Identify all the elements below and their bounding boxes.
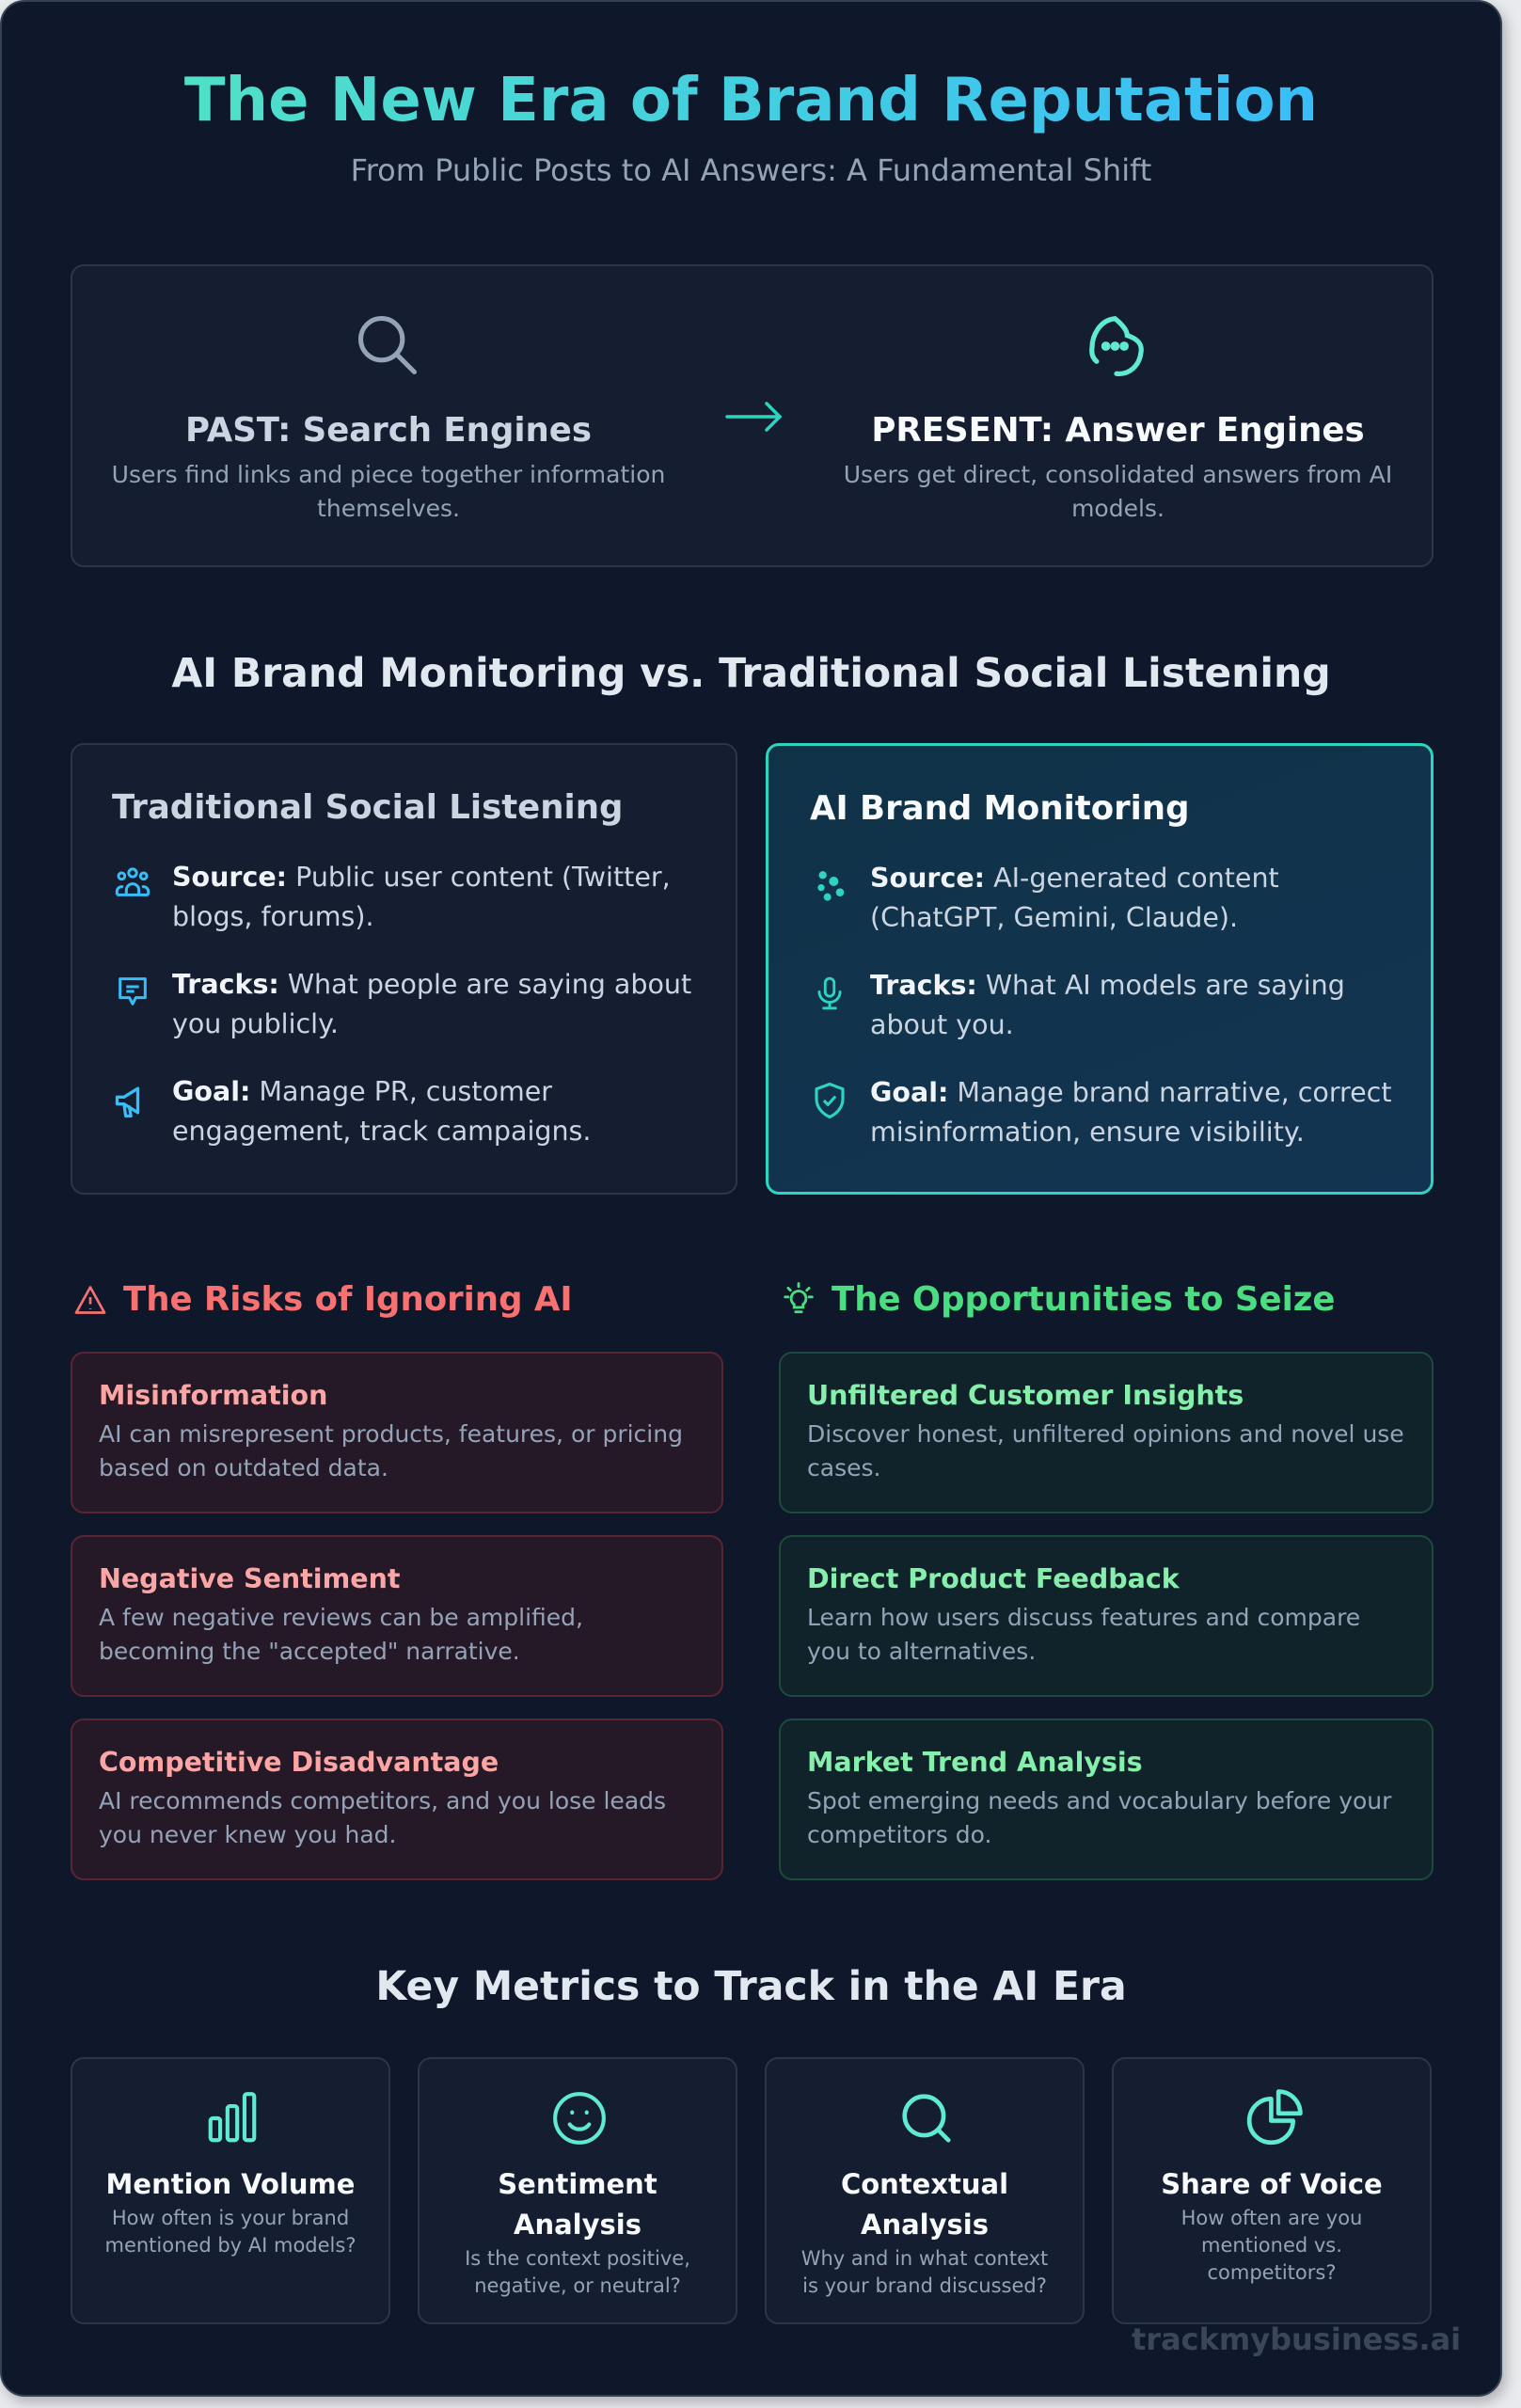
metric: sentiment analysis: Is the context positive,: [465, 2247, 690, 2270]
metric: mention volume: How often is your brand: [112, 2207, 349, 2229]
opportunity card: insights: Unfiltered Customer Insights: [807, 1380, 1244, 1411]
metric: contextual analysis: Why and in what context: [801, 2247, 1048, 2270]
heading: comparison: AI Brand Monitoring vs. Traditional Social Listening: [171, 651, 1331, 697]
heading: past: PAST: Search Engines: [185, 411, 592, 450]
metric: share of voice: [1112, 2057, 1432, 2324]
risk card: negative sentiment: Negative Sentiment: [99, 1563, 401, 1594]
heading: risks: The Risks of Ignoring AI: [123, 1280, 573, 1319]
footer: brand: trackmybusiness.ai: [1132, 2321, 1461, 2357]
icon: lightbulb: [784, 1282, 814, 1313]
item: tracks: Tracks: What people are saying about you publicly.: [172, 969, 691, 1039]
arrow: [725, 402, 783, 432]
metric: sentiment analysis: Sentiment: [498, 2168, 658, 2200]
heading: AI Brand Monitoring: [810, 789, 1189, 828]
metric: contextual analysis: Analysis: [861, 2209, 989, 2241]
metric: contextual analysis: Contextual: [841, 2168, 1008, 2200]
risk card: misinformation: AI can misrepresent products, features, or pricing based on outdated data.: [99, 1420, 683, 1481]
icon: warning: [75, 1286, 105, 1314]
heading: opportunities: The Opportunities to Seize: [832, 1280, 1335, 1319]
metric: contextual analysis: [765, 2057, 1085, 2324]
item: source: Source: AI-generated content (ChatGPT, Gemini, Claude).: [870, 863, 1279, 933]
risk card: negative sentiment: [71, 1535, 723, 1697]
metric: sentiment analysis: negative, or neutral?: [474, 2274, 681, 2297]
text: past description: Users find links and piece together information themselves.: [112, 461, 665, 522]
metric: share of voice: How often are you: [1181, 2207, 1362, 2229]
opportunity card: insights: Discover honest, unfiltered opinions and novel use cases.: [807, 1420, 1404, 1481]
text: present description: Users get direct, consolidated answers from AI models.: [844, 461, 1392, 522]
risk card: misinformation: [71, 1352, 723, 1513]
heading: present: PRESENT: Answer Engines: [871, 411, 1365, 450]
opportunity card: feedback: [779, 1535, 1434, 1697]
opportunity card: trends: Spot emerging needs and vocabulary before your competitors do.: [807, 1787, 1391, 1848]
metric: mention volume: Mention Volume: [106, 2168, 355, 2200]
opportunity card: insights: [779, 1352, 1434, 1513]
panel: AI brand monitoring: [766, 743, 1434, 1195]
item: goal: Goal: Manage brand narrative, correct misinformation, ensure visibility.: [870, 1077, 1392, 1148]
metric: sentiment analysis: [418, 2057, 737, 2324]
metric: share of voice: competitors?: [1208, 2261, 1336, 2284]
icon: search: [358, 316, 417, 374]
metric: share of voice: mentioned vs.: [1201, 2234, 1342, 2257]
item: source: Source: Public user content (Twitter, blogs, forums).: [172, 862, 671, 932]
risk card: competitive disadvantage: AI recommends competitors, and you lose leads you never knew you had.: [99, 1787, 666, 1848]
metric: sentiment analysis: Analysis: [514, 2209, 642, 2241]
item: goal: Goal: Manage PR, customer engagement, track campaigns.: [172, 1076, 591, 1147]
opportunity card: feedback: Direct Product Feedback: [807, 1563, 1180, 1594]
metric: mention volume: mentioned by AI models?: [105, 2234, 356, 2257]
metric: share of voice: Share of Voice: [1161, 2168, 1383, 2200]
risk card: misinformation: Misinformation: [99, 1380, 327, 1411]
risk card: competitive disadvantage: [71, 1719, 723, 1880]
item: tracks: Tracks: What AI models are saying about you.: [870, 970, 1345, 1040]
heading: key metrics: Key Metrics to Track in the AI Era: [375, 1964, 1127, 2010]
risk card: negative sentiment: A few negative reviews can be amplified, becoming the "accepted" narrative.: [99, 1604, 583, 1665]
opportunity card: trends: [779, 1719, 1434, 1880]
metric: mention volume: [71, 2057, 390, 2324]
subtitle: From Public Posts to AI Answers: A Fundamental Shift: [351, 152, 1151, 188]
icon: answer chat head: [1089, 316, 1144, 376]
opportunity card: trends: Market Trend Analysis: [807, 1747, 1143, 1778]
metric: contextual analysis: is your brand discussed?: [802, 2274, 1047, 2297]
opportunity card: feedback: Learn how users discuss features and compare you to alternatives.: [807, 1604, 1360, 1665]
panel: traditional social listening: [71, 743, 737, 1195]
risk card: competitive disadvantage: Competitive Disadvantage: [99, 1747, 499, 1778]
heading: Traditional Social Listening: [112, 788, 623, 827]
panel: past vs present: [71, 264, 1434, 567]
title: The New Era of Brand Reputation: [184, 66, 1318, 135]
